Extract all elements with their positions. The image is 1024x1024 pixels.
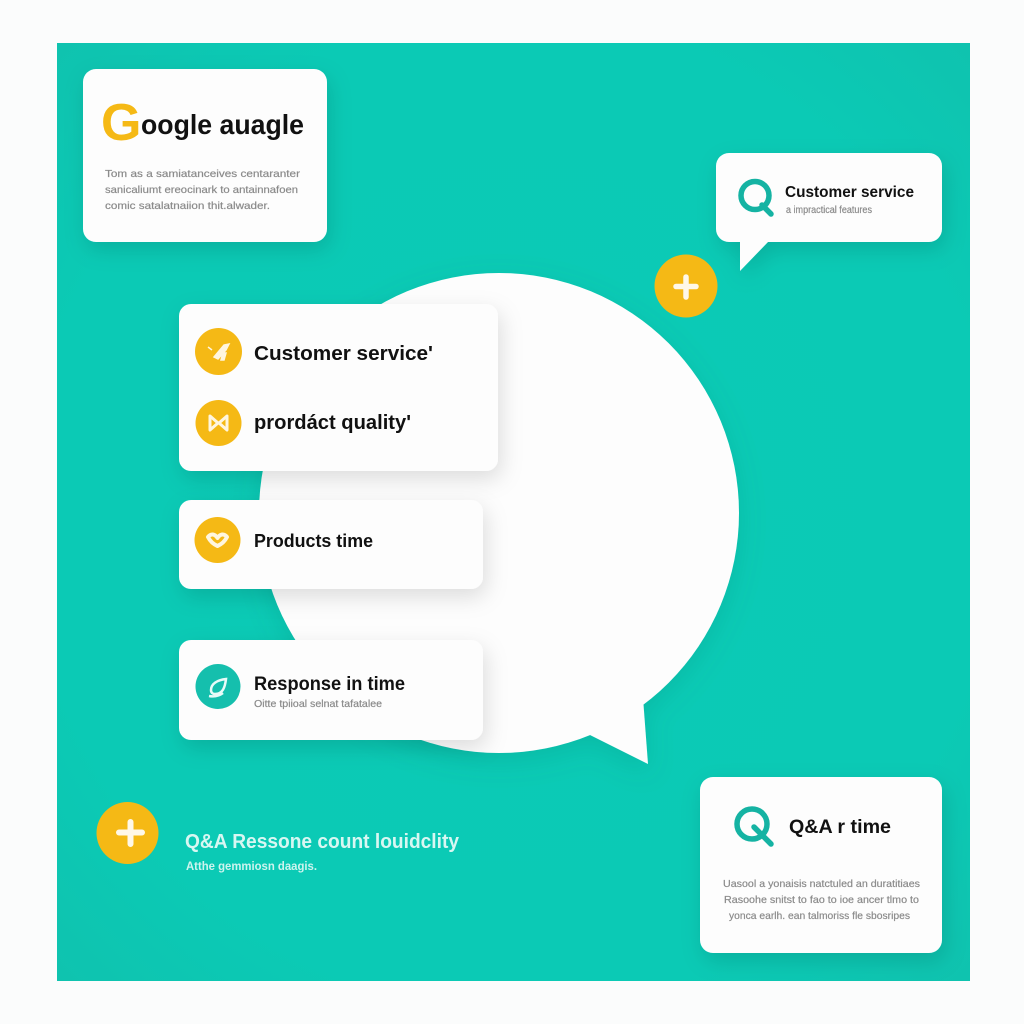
icon: magnifier [741, 182, 771, 214]
panel: Google card [83, 69, 327, 242]
label: customer service: Customer service' [254, 343, 433, 365]
Q&A description: Uasool a yonaisis natctuled an duratitiaes [723, 878, 920, 890]
description text [105, 168, 301, 212]
icon: yellow plus bottom [96, 802, 158, 864]
icon: yellow tools [195, 328, 242, 375]
icon: yellow plus top [654, 254, 718, 318]
label: response in time: Response in time [254, 674, 405, 695]
large speech bubble [259, 273, 739, 764]
icon: yellow G: G [101, 94, 141, 152]
panel: Customer service callout [716, 153, 942, 271]
panel: Q&A time card [700, 777, 942, 953]
icon: teal leaf [196, 664, 240, 709]
description text: sanicaliumt ereocinark to antainnafoen [105, 184, 298, 196]
label: product quality: prordáct quality' [254, 412, 411, 434]
callout heading: Customer service [785, 184, 914, 201]
icon: yellow bow [196, 400, 242, 446]
Q&A description: Rasoohe snitst to fao to ioe ancer tlmo to [724, 894, 919, 906]
callout subtext: a impractical features [786, 205, 872, 216]
teal footer text [185, 831, 460, 873]
Q&A description: yonca earlh. ean talmoriss fle sbosripes [729, 910, 910, 922]
heading: Google: oogle auagle [141, 109, 304, 140]
panel: service and quality card [179, 304, 498, 471]
footer subtext: Atthe gemmiosn daagis. [186, 861, 317, 873]
footer heading: Q&A Ressone count louidclity [185, 831, 460, 853]
description text: comic satalatnaiion thit.alwader. [105, 200, 270, 212]
response subtext: Oitte tpiioal selnat tafatalee [254, 698, 382, 710]
description text: Tom as a samiatanceives centaranter [105, 168, 301, 180]
Q&A description [723, 878, 920, 922]
label: products time: Products time [254, 531, 373, 551]
icon: Q magnifier [737, 809, 771, 844]
panel: products time card [179, 500, 483, 589]
heading: Q&A time: Q&A r time [789, 816, 891, 838]
icon: yellow heart [194, 517, 240, 563]
panel: response in time card [179, 640, 483, 740]
